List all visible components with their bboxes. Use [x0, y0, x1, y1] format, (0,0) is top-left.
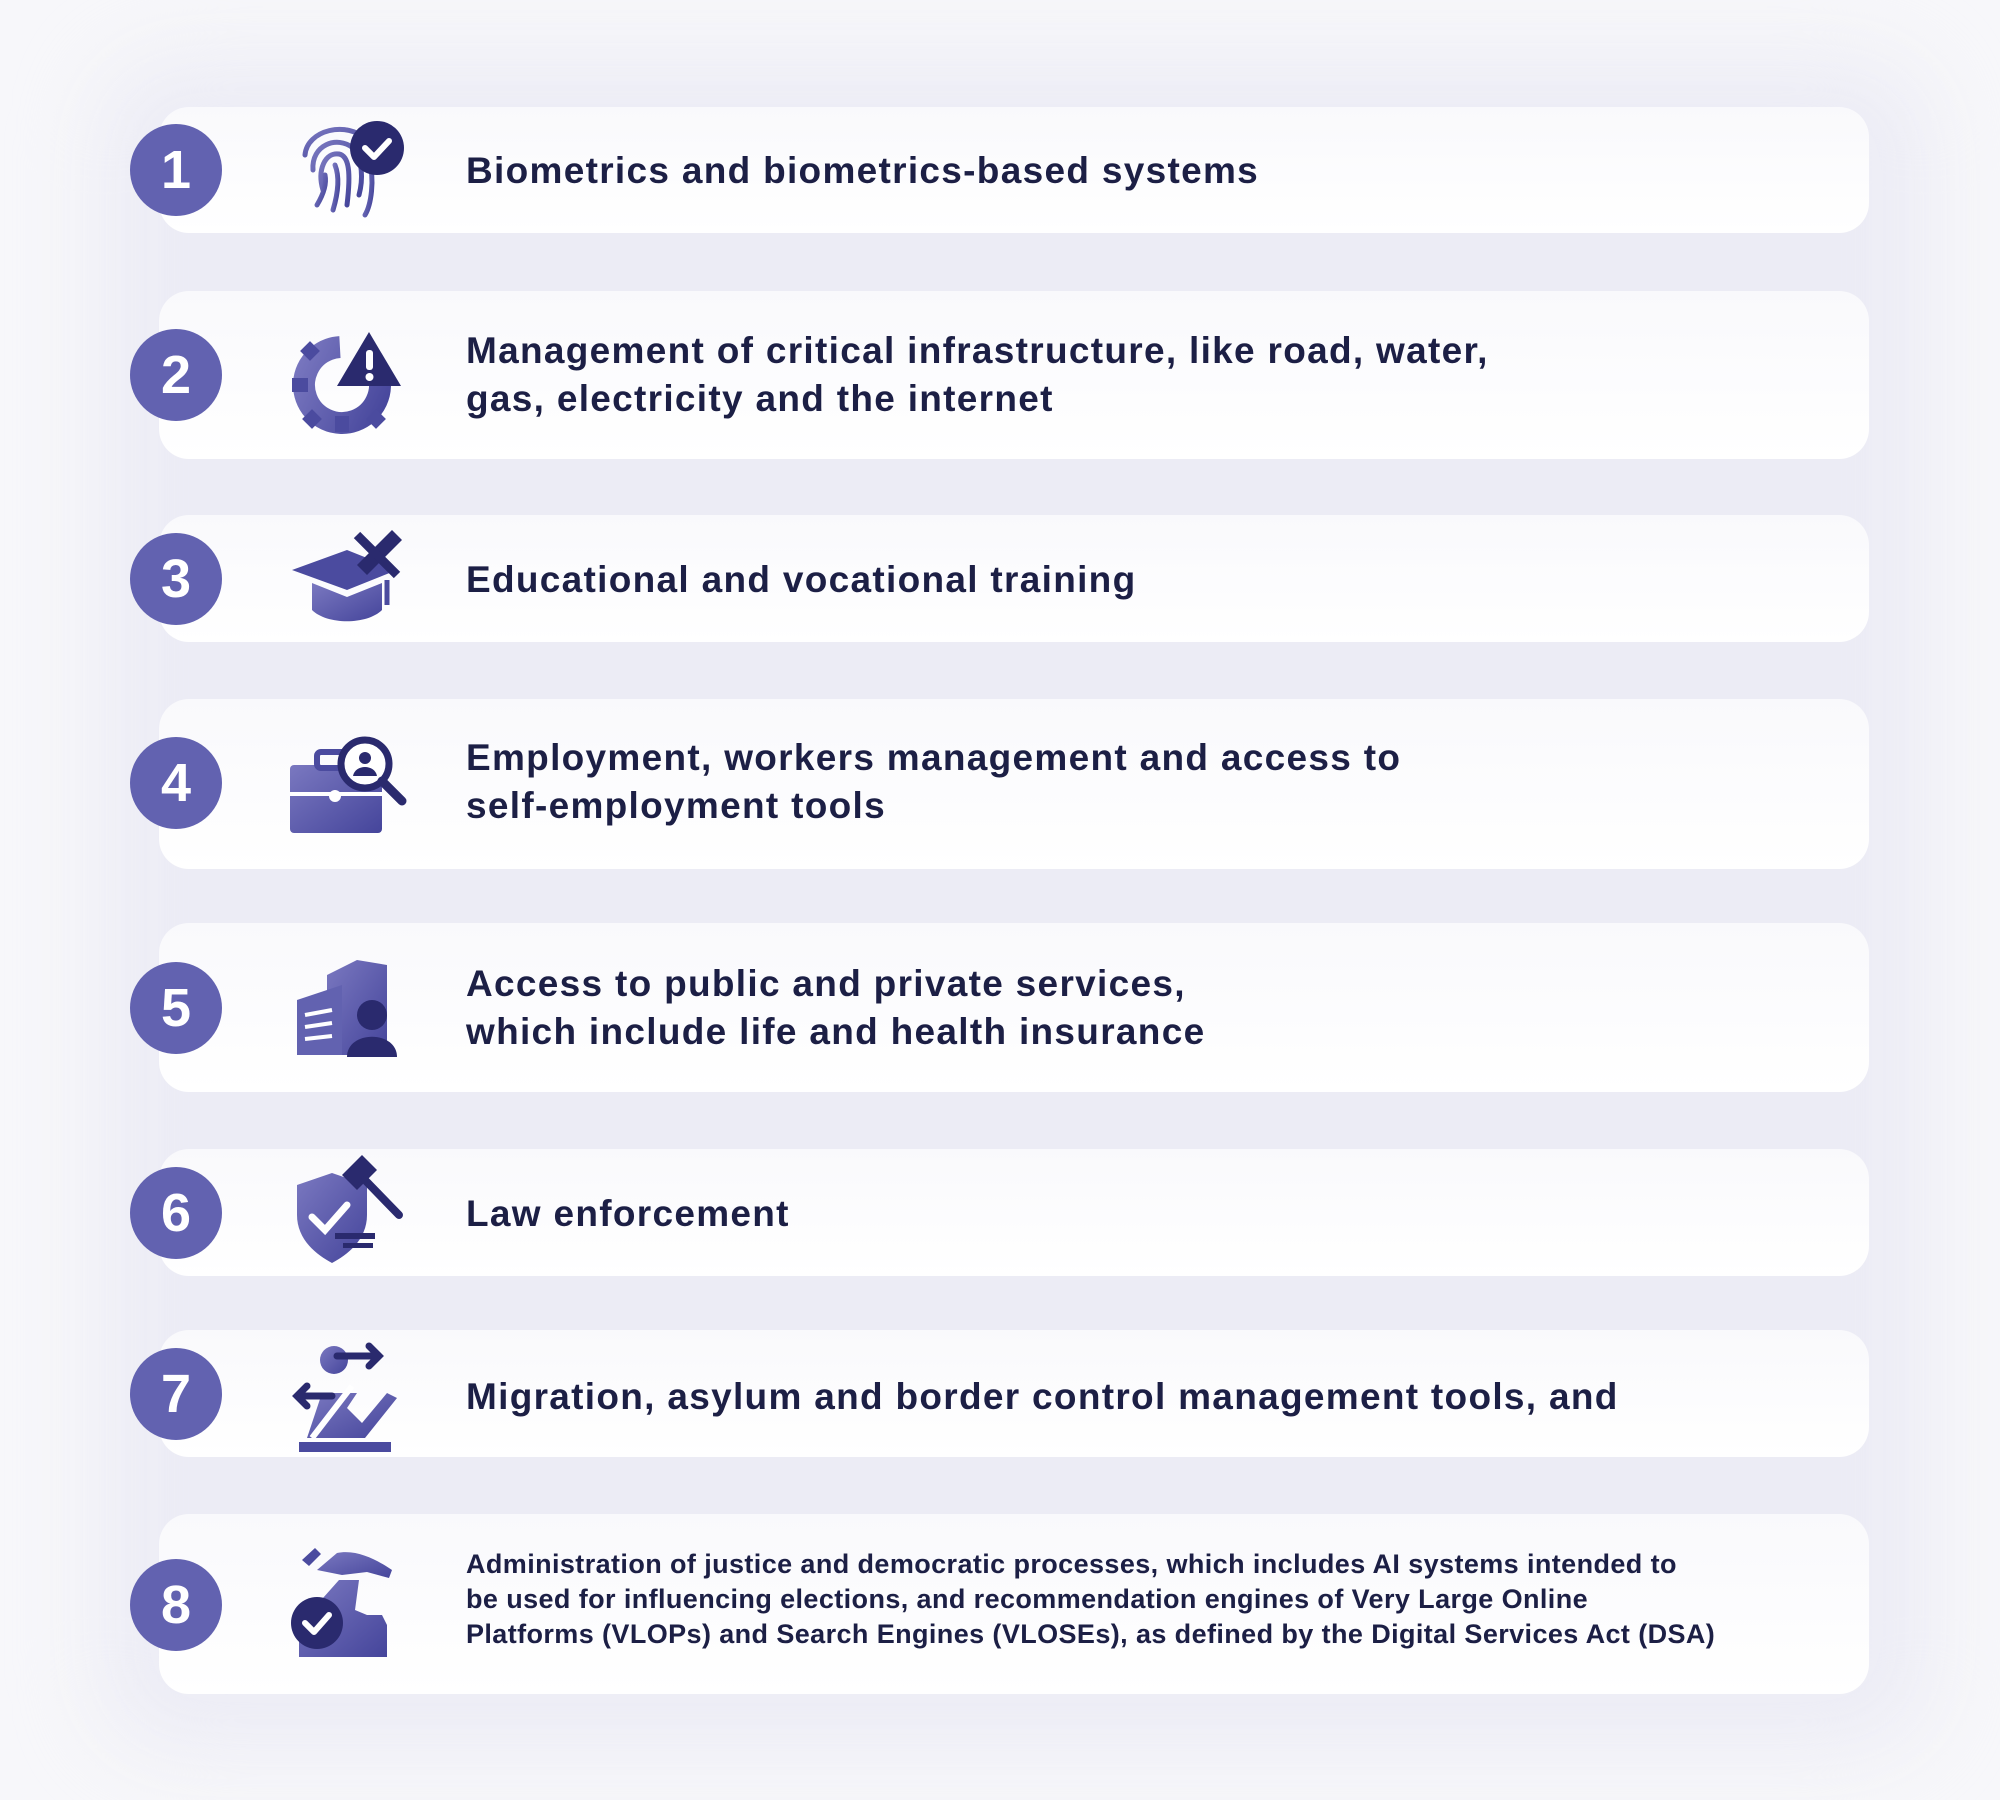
- number 8: 8: [161, 1575, 191, 1635]
- number 5: 5: [161, 978, 191, 1038]
- panel: row 4: [130, 699, 1869, 869]
- number 2: 2: [161, 345, 191, 405]
- text 3: Educational and vocational training: [466, 559, 1136, 600]
- number 3: 3: [161, 549, 191, 609]
- number 8: [130, 1559, 222, 1651]
- panel: row 3: [130, 515, 1869, 642]
- number 6: 6: [161, 1183, 191, 1243]
- text 2: Management of critical infrastructure, like road, water,: [466, 330, 1489, 371]
- text 4: self-employment tools: [466, 785, 886, 826]
- icon: fingerprint: [302, 121, 404, 218]
- number 3: [130, 533, 222, 625]
- panel: row 5: [130, 923, 1869, 1092]
- text 2: [466, 330, 1489, 419]
- number 6: [130, 1167, 222, 1259]
- text 4: Employment, workers management and access to: [466, 737, 1401, 778]
- text 8: Platforms (VLOPs) and Search Engines (VLOSEs), as defined by the Digital Services Act (DSA): [466, 1619, 1715, 1649]
- text 8: [466, 1549, 1715, 1649]
- text 1: Biometrics and biometrics-based systems: [466, 150, 1259, 191]
- number 1: [130, 124, 222, 216]
- text 5: which include life and health insurance: [466, 1011, 1205, 1052]
- number 4: [130, 737, 222, 829]
- text 2: gas, electricity and the internet: [466, 378, 1054, 419]
- panel: row 6: [130, 1149, 1869, 1276]
- number 7: [130, 1348, 222, 1440]
- icon: shield gavel: [297, 1155, 403, 1263]
- icon: ballot box: [291, 1548, 392, 1657]
- icon: migration: [292, 1342, 397, 1452]
- text 5: Access to public and private services,: [466, 963, 1186, 1004]
- text 4: [466, 737, 1401, 826]
- number 5: [130, 962, 222, 1054]
- text 8: Administration of justice and democratic processes, which includes AI systems intended to: [466, 1549, 1677, 1579]
- text 6: Law enforcement: [466, 1193, 790, 1234]
- text 5: [466, 963, 1205, 1052]
- number 4: 4: [161, 753, 191, 813]
- icon: graduation cap: [292, 530, 402, 622]
- number 7: 7: [161, 1364, 191, 1424]
- panel: row 2: [130, 291, 1869, 459]
- icon: briefcase search: [290, 736, 406, 833]
- icon: building person: [297, 960, 397, 1057]
- text 7: Migration, asylum and border control management tools, and: [466, 1376, 1619, 1417]
- panel: row 8: [130, 1514, 1869, 1694]
- number 2: [130, 329, 222, 421]
- text 8: be used for influencing elections, and recommendation engines of Very Large Online: [466, 1584, 1588, 1614]
- panel: row 1: [130, 107, 1869, 233]
- icon: gear warning: [292, 332, 401, 434]
- number 1: 1: [161, 140, 191, 200]
- panel: row 7: [130, 1330, 1869, 1457]
